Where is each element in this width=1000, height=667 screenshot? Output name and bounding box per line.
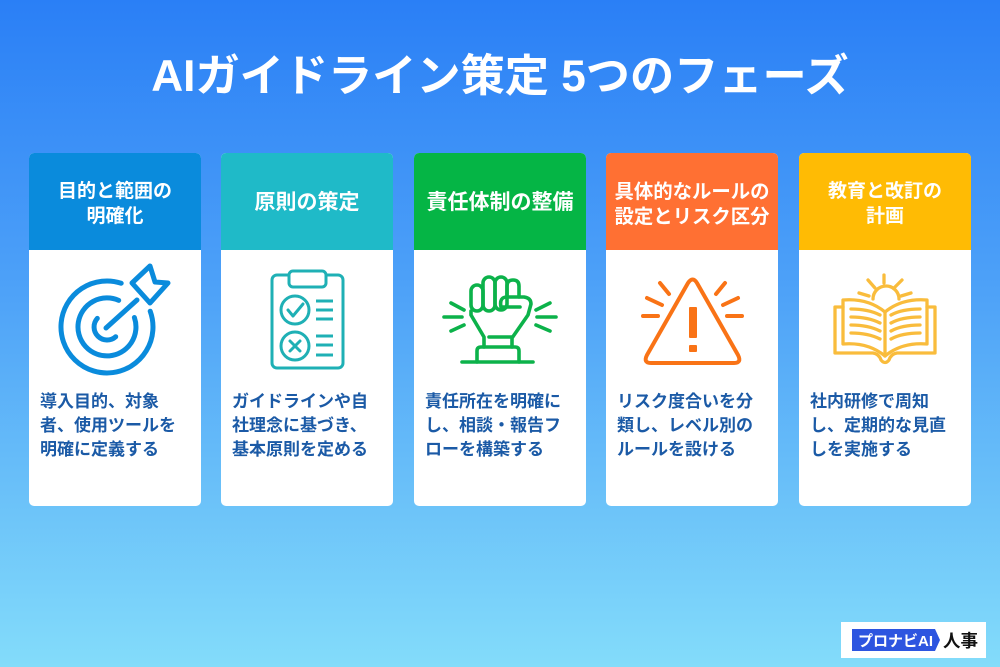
heading: phase 2 bbox=[221, 153, 393, 250]
heading: phase 4: 具体的なルールの bbox=[614, 181, 770, 203]
text: phase 1 bbox=[40, 392, 176, 459]
heading: phase 4 bbox=[606, 153, 778, 250]
text: phase 5 bbox=[810, 392, 946, 459]
text: phase 3: ローを構築する bbox=[425, 440, 544, 459]
text: phase 3: し、相談・報告フ bbox=[425, 416, 561, 435]
panel: phase 3 bbox=[414, 153, 586, 506]
icon: open book with sun bbox=[835, 275, 935, 362]
heading: phase 5 bbox=[799, 153, 971, 250]
text: phase 4: 類し、レベル別の bbox=[617, 416, 753, 435]
text: phase 2 bbox=[232, 392, 368, 459]
panel: phase 4 bbox=[606, 153, 778, 506]
text: phase 4: ルールを設ける bbox=[617, 440, 736, 459]
text: phase 3 bbox=[425, 392, 561, 459]
text: phase 2: ガイドラインや自 bbox=[232, 392, 368, 411]
heading: phase 5: 計画 bbox=[866, 206, 904, 227]
panel: phase 5 bbox=[799, 153, 971, 506]
heading: phase 2: 原則の策定 bbox=[254, 191, 360, 214]
panel: phase 1 bbox=[29, 153, 201, 506]
heading: phase 3: 責任体制の整備 bbox=[426, 191, 574, 214]
text: phase 5: 社内研修で周知 bbox=[810, 392, 929, 411]
text: phase 1: 導入目的、対象 bbox=[40, 392, 159, 411]
heading: phase 5: 教育と改訂の bbox=[828, 181, 942, 202]
text: phase 3: 責任所在を明確に bbox=[425, 392, 561, 411]
text: phase 5: しを実施する bbox=[810, 440, 912, 459]
text: phase 4 bbox=[617, 392, 753, 459]
heading: phase 1: 目的と範囲の bbox=[58, 181, 172, 202]
icon: target with arrow bbox=[61, 266, 168, 373]
icon: raised fist bbox=[444, 277, 556, 362]
icon: checklist clipboard bbox=[272, 271, 343, 368]
heading: phase 4: 設定とリスク区分 bbox=[614, 206, 770, 228]
text: phase 2: 基本原則を定める bbox=[232, 440, 368, 459]
heading: phase 1: 明確化 bbox=[86, 206, 144, 227]
title: AIガイドライン策定 5つのフェーズ bbox=[151, 52, 849, 101]
heading: phase 3 bbox=[414, 153, 586, 250]
text: phase 4: リスク度合いを分 bbox=[617, 392, 753, 411]
text: phase 1: 者、使用ツールを bbox=[40, 416, 176, 435]
logo: プロナビAI 人事: 人事 bbox=[943, 631, 978, 651]
panel: phase 2 bbox=[221, 153, 393, 506]
heading: phase 1 bbox=[29, 153, 201, 250]
text: phase 1: 明確に定義する bbox=[40, 440, 159, 459]
text: phase 2: 社理念に基づき、 bbox=[232, 416, 367, 435]
logo: プロナビAI 人事: プロナビAI bbox=[858, 632, 933, 650]
text: phase 5: し、定期的な見直 bbox=[810, 416, 946, 435]
logo: プロナビAI 人事 bbox=[841, 622, 986, 658]
icon: warning triangle bbox=[643, 280, 742, 363]
